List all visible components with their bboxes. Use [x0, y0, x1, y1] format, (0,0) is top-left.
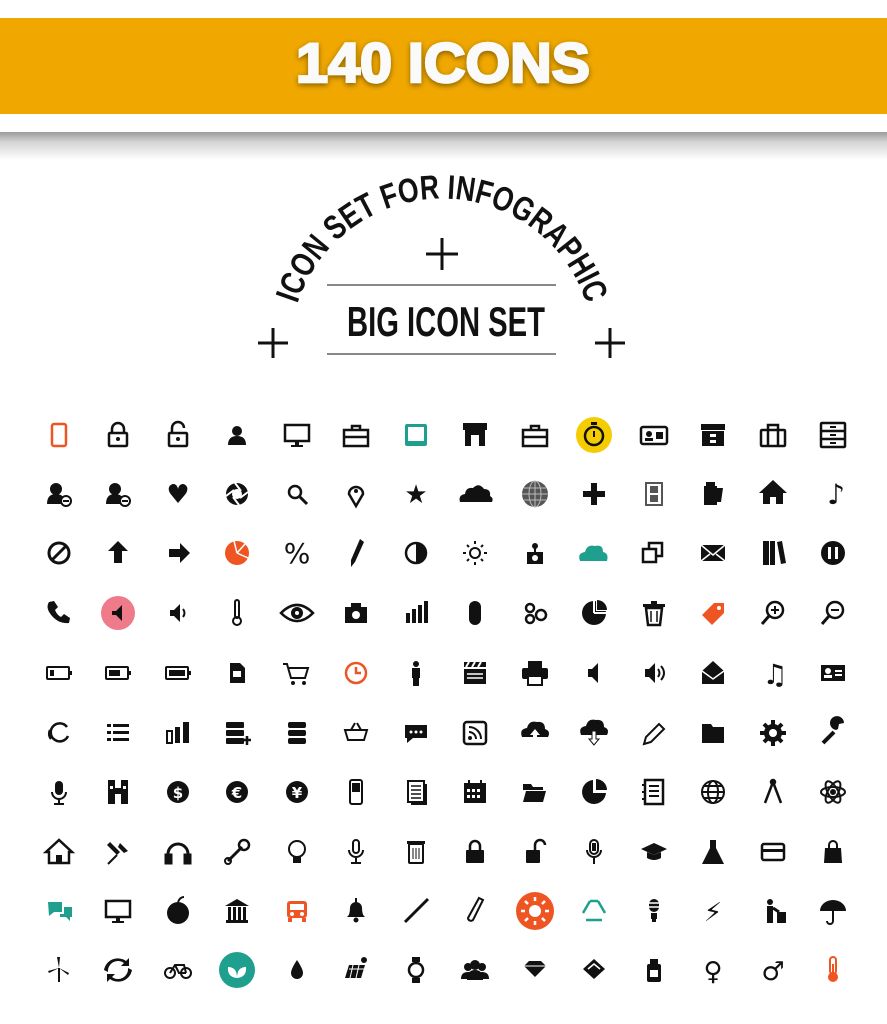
row 10 [48, 952, 838, 988]
row 2: ♥ [166, 480, 190, 510]
row 4 [48, 596, 843, 630]
subtitle block [258, 175, 625, 358]
arched text: ICON SET FOR INFOGRAPHIC [276, 175, 606, 302]
big icon set: BIG ICON SET [347, 298, 545, 345]
row 7: ¥ [292, 784, 303, 802]
row 5 [47, 658, 845, 691]
row 3: % [284, 537, 310, 570]
row 10: ♀ [703, 957, 723, 987]
row 9 [48, 892, 846, 930]
row 6 [49, 716, 844, 746]
banner [0, 18, 887, 114]
row 5: ♫ [762, 658, 788, 691]
row 7: € [231, 784, 242, 802]
row 3 [49, 537, 845, 570]
plus left [258, 328, 288, 358]
row 2: ★ [404, 480, 428, 510]
row 10: ♂ [761, 957, 785, 987]
row 7 [52, 779, 845, 805]
plus top [426, 238, 458, 270]
icon grid [46, 417, 846, 988]
row 7: $ [173, 784, 183, 802]
title: 140 ICONS [296, 31, 590, 94]
plus right [595, 328, 625, 358]
shadow band [0, 132, 887, 160]
row 1 [52, 417, 845, 453]
row 8 [46, 840, 842, 864]
row 2 [47, 478, 845, 511]
row 9: ⚡ [704, 898, 722, 928]
row 2: ♪ [827, 478, 845, 511]
